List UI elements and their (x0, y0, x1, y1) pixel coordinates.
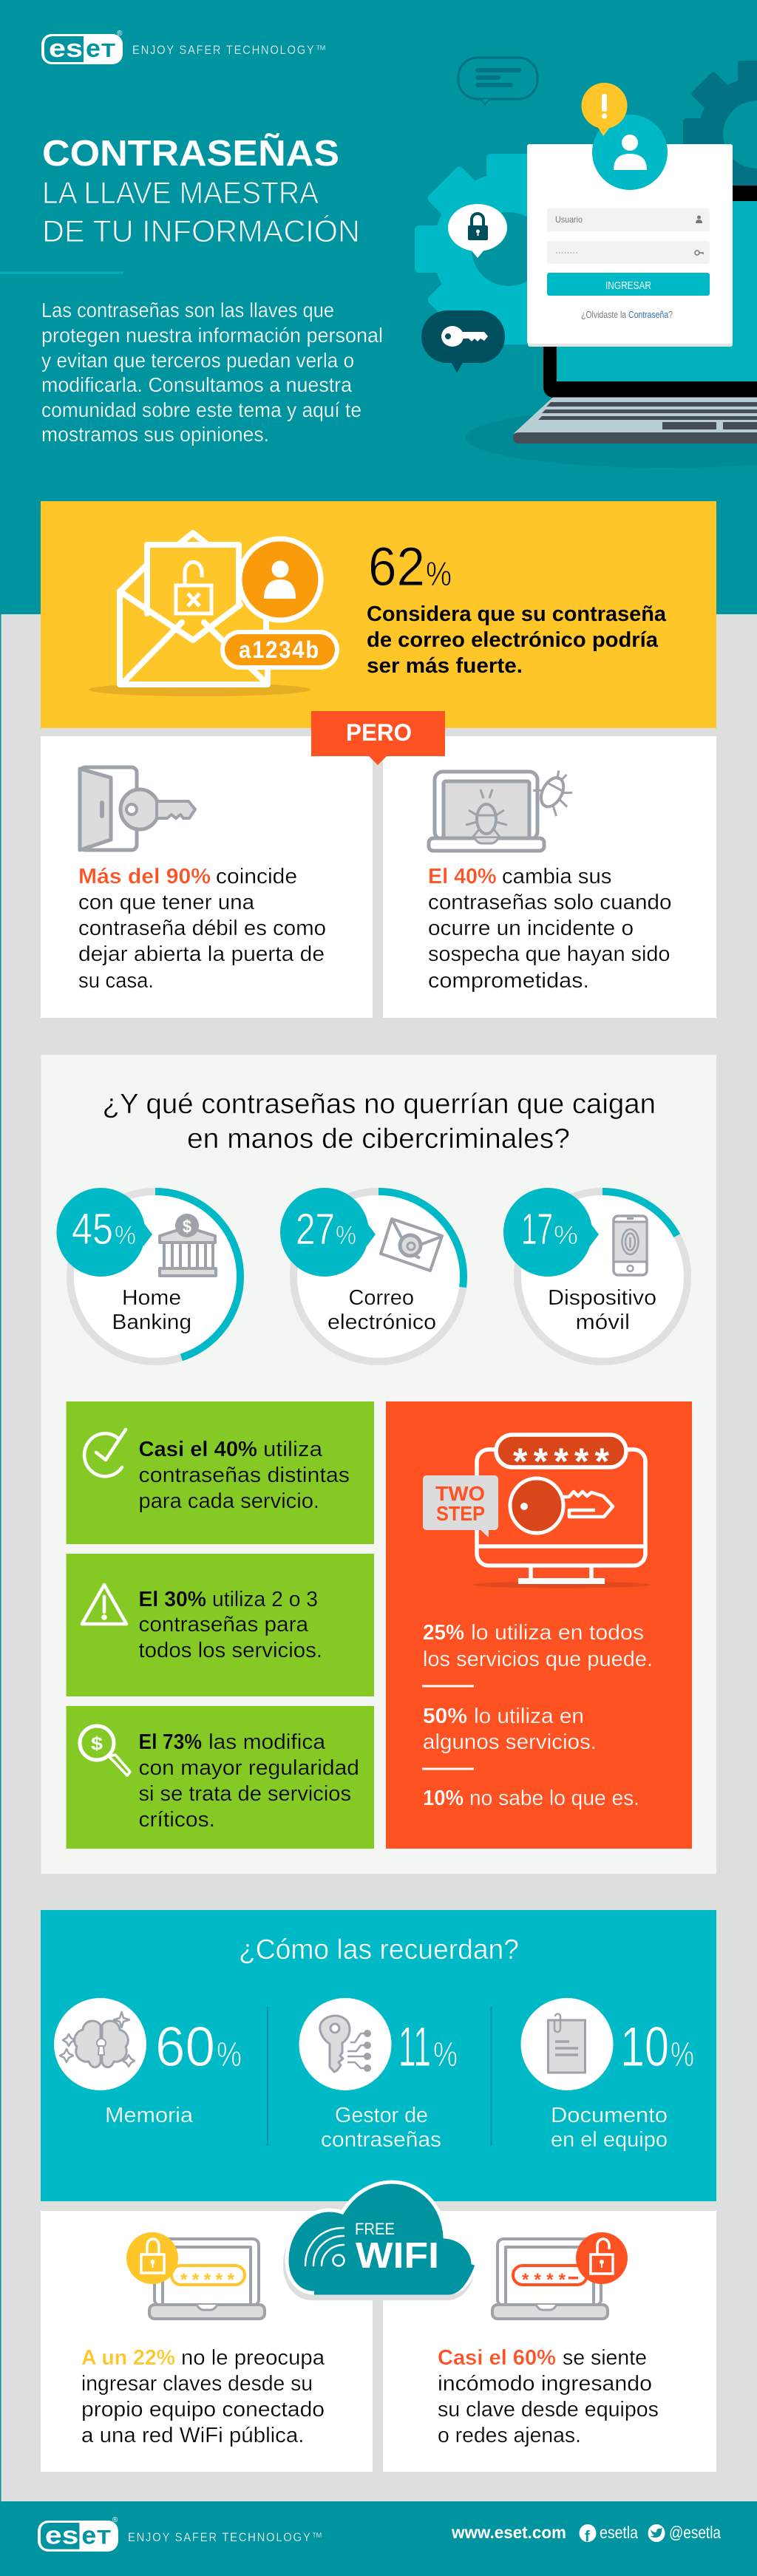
panel: right white card (383, 736, 716, 1018)
badge: PERO (311, 711, 445, 765)
text: two step stats: 25% (423, 1621, 464, 1645)
text: casi el 60%: Casi el 60% (438, 2346, 556, 2370)
panel: bottom right white card (383, 2211, 716, 2472)
stat: documento 10%: % (671, 2034, 694, 2073)
icon: magnifier dollar (80, 1726, 130, 1775)
panel: login card (527, 144, 733, 347)
badge: two step (423, 1475, 498, 1537)
text: stat description: de correo electrónico podría (367, 628, 659, 652)
icon: secure laptop (126, 2232, 265, 2319)
text: two step stats (422, 1621, 653, 1810)
field: usuario (547, 208, 710, 231)
logo: ESET footer: e (81, 2521, 96, 2550)
logo: ESET footer: ® (112, 2516, 118, 2524)
icon: laptop (513, 186, 757, 444)
stat: memoria 60% (54, 1998, 242, 2127)
field: usuario: Usuario (555, 214, 583, 225)
chart: dispositivo móvil 17%: móvil (575, 1311, 630, 1334)
text: el 40%: El 40% (428, 865, 497, 888)
chart: correo electrónico 27%: % (336, 1221, 356, 1250)
chart: correo electrónico 27%: Correo (349, 1286, 414, 1310)
stat: gestor 11%: Gestor de (335, 2104, 428, 2127)
stat: gestor 11%: 11 (398, 2016, 431, 2079)
stat: memoria 60%: Memoria (105, 2104, 194, 2127)
card: casi el 40%: Casi el 40% (139, 1438, 257, 1461)
text: el 40% (428, 865, 671, 993)
panel: footer: @esetla (669, 2523, 721, 2542)
heading: en manos de cibercriminales? (187, 1124, 570, 1155)
icon: laptop with bugs (429, 764, 580, 851)
chart: home banking 45%: Banking (112, 1311, 191, 1334)
icon: magnifier dollar: $ (91, 1733, 103, 1754)
text: más del 90%: su casa. (78, 969, 154, 993)
stat: memoria 60%: 60 (155, 2016, 215, 2079)
icon: phone fingerprint (614, 1216, 647, 1275)
chart: home banking 45%: % (115, 1221, 136, 1250)
icon: light gear (415, 154, 605, 344)
text: casi el 60%: o redes ajenas. (438, 2424, 581, 2447)
icon: envelope with weak password (89, 533, 337, 696)
website: www.eset.com (451, 2523, 566, 2542)
icon: monitor two step (423, 1435, 651, 1588)
link: olvidaste contraseña: ¿Olvidaste la Contraseña? (581, 309, 673, 320)
intro paragraph: Las contraseñas son las llaves que (41, 299, 334, 322)
stat: 62%: % (426, 554, 452, 593)
icon: user avatar (592, 115, 668, 190)
icon: key bubble (421, 310, 505, 373)
panel: footer (0, 2501, 757, 2576)
icon: insecure laptop: **** (522, 2270, 566, 2290)
icon: free wifi cloud (285, 2182, 473, 2298)
text: casi el 60%: incómodo ingresando (438, 2372, 652, 2396)
tagline footer: ENJOY SAFER TECHNOLOGY™ (128, 2530, 324, 2544)
field: password (547, 241, 710, 264)
icon: door and key (80, 767, 195, 850)
icon: bank (160, 1214, 216, 1276)
panel: cómo las recuerdan (41, 1910, 716, 2201)
text: two step stats: los servicios que puede. (423, 1648, 653, 1671)
stat: 62%: 62 (368, 536, 425, 597)
text: casi el 60%: su clave desde equipos (438, 2398, 659, 2422)
logo: ESET header: T (101, 39, 115, 61)
heading: ¿Cómo las recuerdan? (239, 1934, 519, 1965)
icon: key with circuits (320, 2016, 371, 2072)
intro paragraph: mostramos sus opiniones. (41, 423, 269, 446)
intro paragraph: protegen nuestra información personal (41, 324, 383, 347)
icon: warning (82, 1585, 126, 1624)
text: two step stats: algunos servicios. (423, 1730, 597, 1754)
icon: wifi waves (305, 2228, 344, 2266)
chart: dispositivo móvil 17% (503, 1188, 688, 1362)
card: casi el 40%: contraseñas distintas (139, 1464, 350, 1487)
panel: left white card (41, 736, 373, 1018)
text: two step stats: lo utiliza en (474, 1705, 584, 1728)
chart: correo electrónico 27%: 27 (296, 1205, 335, 1254)
icon: free wifi cloud: WIFI (356, 2236, 439, 2276)
stat: gestor 11%: % (433, 2034, 458, 2073)
icon: check (84, 1430, 126, 1476)
button: ingresar (547, 273, 710, 296)
text: el 40%: cambia sus (502, 865, 612, 888)
chart: dispositivo móvil 17%: % (554, 1221, 578, 1250)
text: stat description: ser más fuerte. (367, 654, 523, 678)
chart: dispositivo móvil 17%: Dispositivo (548, 1286, 656, 1310)
field: password: ········ (555, 248, 578, 257)
intro paragraph: comunidad sobre este tema y aquí te (41, 398, 361, 421)
text: el 40%: comprometidas. (428, 969, 589, 993)
intro paragraph: modificarla. Consultamos a nuestra (41, 373, 353, 396)
card: el 30%: todos los servicios. (139, 1639, 322, 1662)
text: casi el 60% (438, 2346, 659, 2447)
card: el 30%: El 30% (139, 1588, 206, 1611)
card: el 30% (67, 1554, 374, 1696)
icon: alert bubble (581, 83, 627, 136)
text: stat description (367, 602, 667, 678)
card: el 73%: si se trata de servicios (139, 1782, 351, 1806)
logo: ESET header: es (49, 35, 83, 63)
title: LA LLAVE MAESTRA (42, 175, 319, 210)
stat: gestor 11% (299, 1998, 458, 2152)
stat: documento 10%: Documento (551, 2104, 668, 2127)
logo: ESET header (41, 30, 123, 64)
text: a un 22%: A un 22% (81, 2346, 175, 2370)
card: el 30%: contraseñas para (139, 1613, 308, 1637)
chart: home banking 45% (56, 1188, 240, 1362)
chart: dispositivo móvil 17%: 17 (521, 1205, 553, 1254)
text: two step stats: lo utiliza en todos (471, 1621, 644, 1645)
text: a un 22%: ingresar claves desde su (81, 2372, 313, 2396)
icon: twitter (648, 2524, 665, 2542)
intro paragraph (41, 299, 383, 446)
stat: memoria 60%: % (217, 2034, 242, 2073)
icon: dark gear (683, 61, 757, 208)
text: two step stats: 50% (423, 1705, 467, 1728)
text: más del 90%: con que tener una (78, 891, 254, 914)
title (42, 134, 360, 248)
icon: lock bubble (448, 204, 507, 258)
icon: facebook (580, 2524, 596, 2545)
badge: two step: STEP (436, 1502, 485, 1525)
badge: PERO: PERO (346, 719, 412, 746)
text: two step stats: 10% (423, 1787, 464, 1810)
text: a un 22%: no le preocupa (181, 2346, 325, 2370)
card: casi el 40%: para cada servicio. (139, 1489, 319, 1513)
stat: documento 10%: 10 (620, 2016, 669, 2079)
text: a un 22%: a una red WiFi pública. (81, 2424, 305, 2447)
icon: laptop shadow (466, 407, 757, 468)
text: más del 90%: Más del 90% (78, 865, 211, 888)
heading: ¿Y qué contraseñas no querrían que caigan (102, 1089, 656, 1120)
chart: correo electrónico 27%: electrónico (327, 1311, 436, 1334)
icon: speech bubble outline (458, 58, 537, 104)
text: two step stats: no sabe lo que es. (469, 1787, 639, 1810)
text: más del 90%: contraseña débil es como (78, 917, 326, 940)
panel: footer: esetla (600, 2523, 638, 2542)
chart: home banking 45%: Home (122, 1286, 181, 1310)
icon: brain (60, 2012, 135, 2067)
card: el 73% (67, 1706, 374, 1849)
intro paragraph: y evitan que terceros puedan verla o (41, 349, 354, 372)
card: el 73%: críticos. (139, 1808, 215, 1832)
stat: gestor 11%: contraseñas (321, 2128, 441, 2152)
icon: email envelope (381, 1219, 442, 1271)
stat: documento 10%: en el equipo (551, 2128, 668, 2152)
stat: documento 10% (520, 1998, 694, 2152)
text: más del 90%: dejar abierta la puerta de (78, 942, 325, 966)
icon: facebook: f (585, 2529, 590, 2545)
text: a un 22%: propio equipo conectado (81, 2398, 325, 2422)
title: CONTRASEÑAS (42, 134, 339, 174)
badge: two step: TWO (435, 1482, 485, 1505)
panel: qué contraseñas (41, 1055, 716, 1874)
heading (102, 1089, 656, 1155)
card: el 73%: con mayor regularidad (139, 1756, 359, 1780)
text: a un 22% (81, 2346, 325, 2447)
logo: ESET header: e (86, 35, 101, 63)
card: el 73%: El 73% (139, 1730, 202, 1754)
card: casi el 40%: utiliza (263, 1438, 322, 1461)
text: más del 90% (78, 865, 326, 993)
icon: envelope with weak password: a1234b (239, 636, 320, 663)
chart: correo electrónico 27% (280, 1188, 464, 1362)
card: el 73%: las modifica (208, 1730, 325, 1754)
logo: ESET header: ® (117, 30, 123, 38)
tagline header: ENJOY SAFER TECHNOLOGY™ (132, 43, 327, 57)
chart: home banking 45%: 45 (72, 1205, 113, 1254)
icon: bank: $ (183, 1217, 192, 1237)
text: el 40%: sospecha que hayan sido (428, 942, 670, 966)
icon: document with clip (549, 2013, 585, 2073)
panel: 62% yellow (41, 501, 716, 728)
icon: secure laptop: ***** (180, 2270, 235, 2290)
icon: insecure laptop (492, 2232, 628, 2319)
logo: ESET footer: es (45, 2521, 78, 2550)
card: two step (386, 1401, 692, 1849)
illustration: login screen on laptop with gears (415, 58, 757, 468)
panel: bottom left white card (41, 2211, 373, 2472)
logo: ESET footer (38, 2516, 118, 2552)
card: el 30%: utiliza 2 o 3 (212, 1588, 318, 1611)
card: casi el 40% (67, 1401, 374, 1544)
text: el 40%: contraseñas solo cuando (428, 891, 671, 914)
icon: monitor two step: ***** (513, 1441, 610, 1482)
text: más del 90%: coincide (216, 865, 297, 888)
title: DE TU INFORMACIÓN (42, 214, 360, 248)
logo: ESET footer: T (97, 2526, 111, 2549)
button: ingresar: INGRESAR (605, 279, 651, 292)
text: stat description: Considera que su contraseña (367, 602, 667, 626)
text: casi el 60%: se siente (563, 2346, 647, 2370)
text: el 40%: ocurre un incidente o (428, 917, 634, 940)
icon: free wifi cloud: FREE (355, 2220, 395, 2238)
